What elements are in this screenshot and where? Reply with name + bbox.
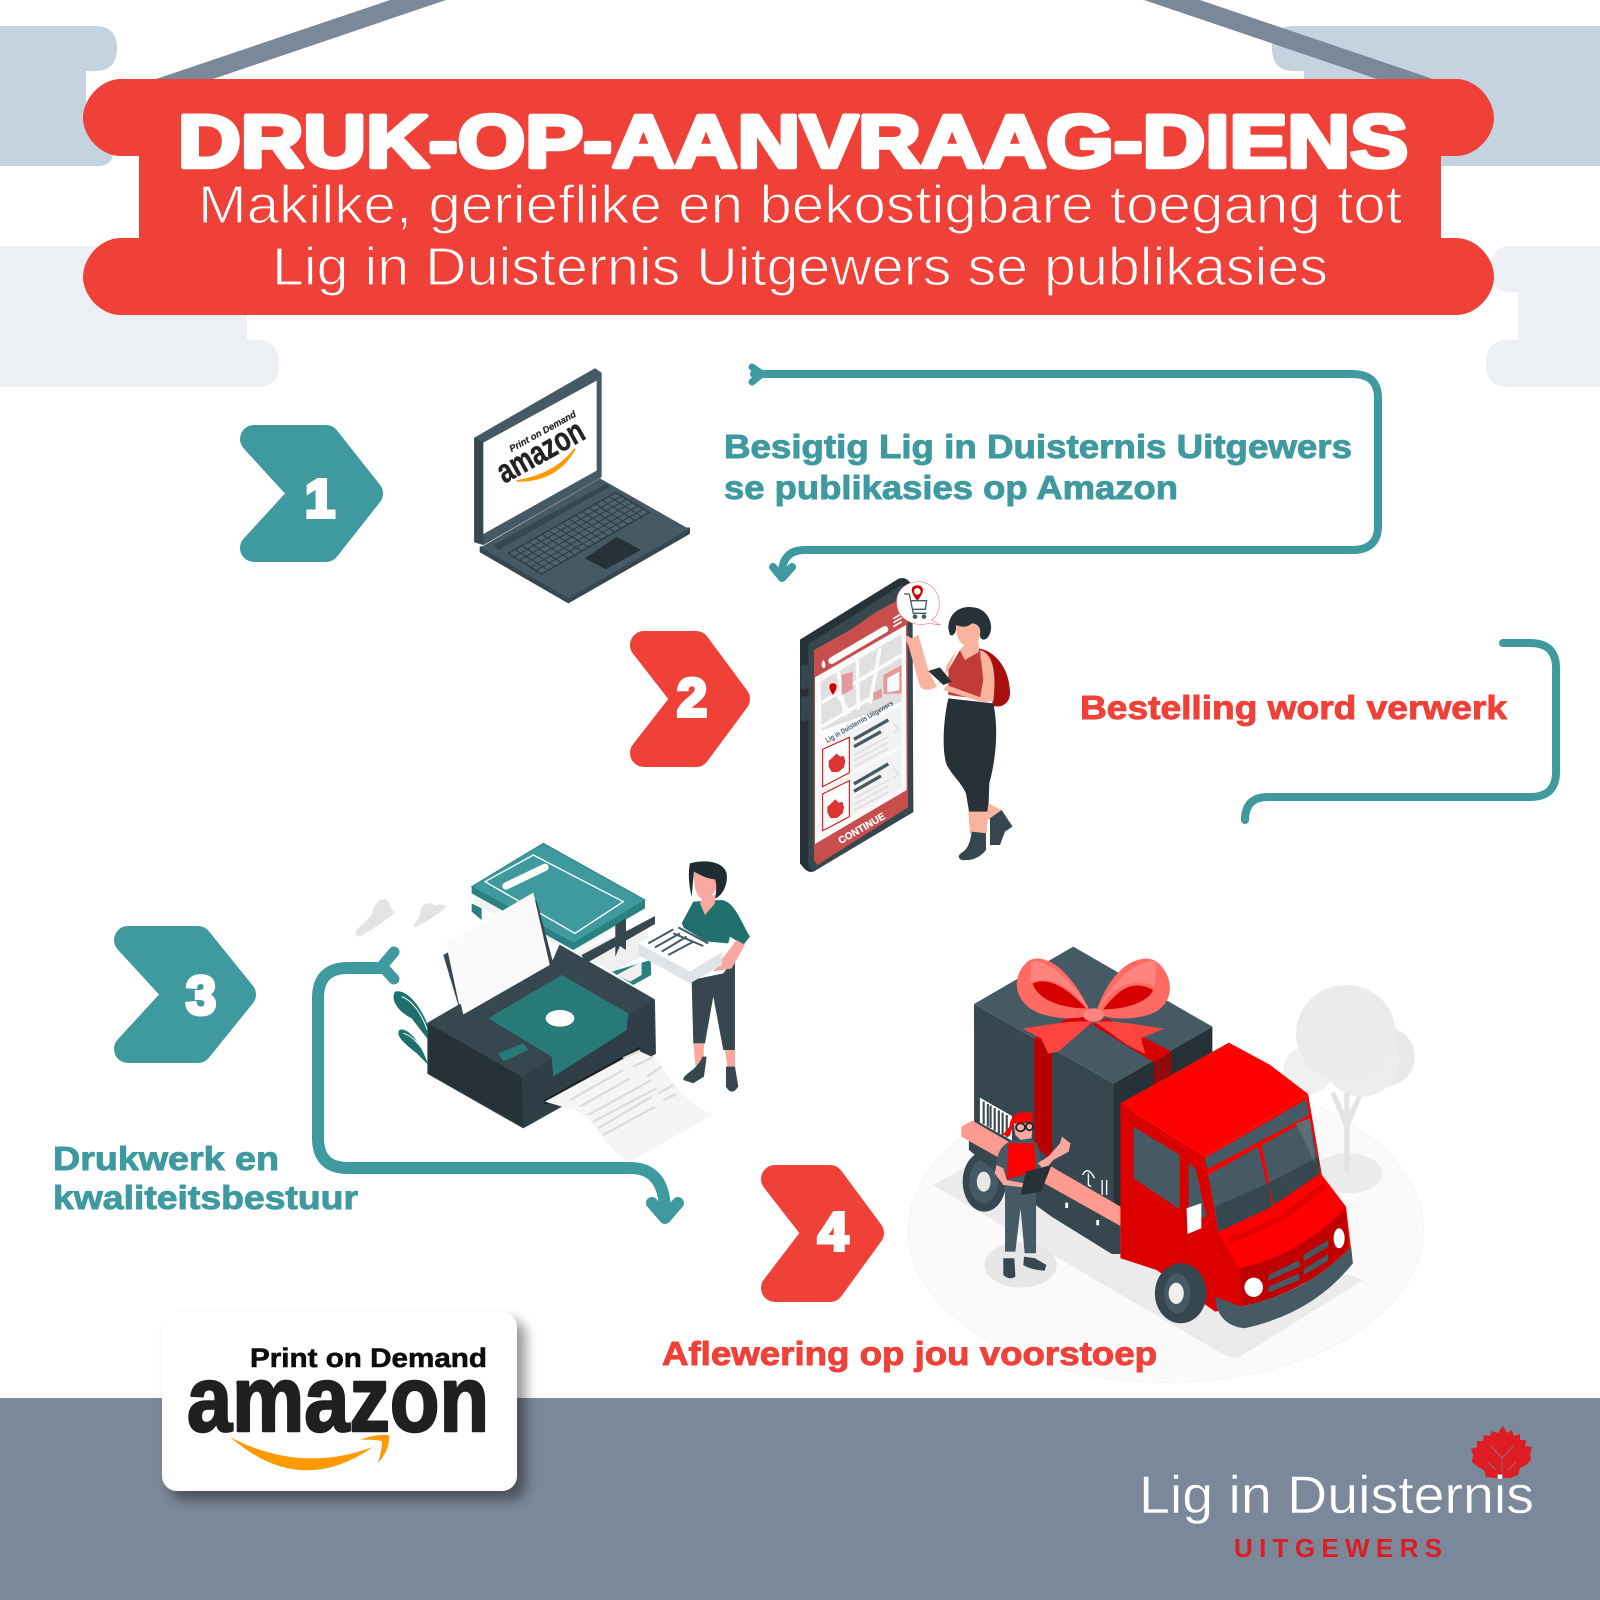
- step 3 label: kwaliteitsbestuur: [53, 1179, 358, 1216]
- print on demand text: Print on Demand: [250, 1343, 487, 1373]
- phone: [801, 579, 913, 872]
- gift box: [974, 947, 1212, 1208]
- list items: [818, 707, 902, 835]
- ground: [908, 1077, 1423, 1383]
- cart speech bubble: [897, 582, 941, 625]
- flame tree mark: [1471, 1426, 1532, 1478]
- bumper: [1215, 1247, 1353, 1328]
- laptop illustration: [475, 369, 689, 602]
- mirror: [1187, 1203, 1201, 1234]
- woman: [905, 607, 1013, 860]
- number 3: 3: [186, 966, 216, 1026]
- trackpad: [585, 537, 641, 569]
- step 2 label: Bestelling word verwerk: [1080, 689, 1508, 726]
- arrow: step 2 to step 3: [1245, 643, 1556, 820]
- headlights: [1244, 1278, 1263, 1297]
- footer band: [0, 1398, 1600, 1600]
- screen logo: amazon: [490, 413, 591, 491]
- smoke clouds: [355, 899, 447, 937]
- truck bed rail: [961, 1121, 1120, 1226]
- laptop screen: [475, 369, 601, 544]
- step 4 chevron: [775, 1179, 870, 1288]
- printer body: [428, 946, 655, 1127]
- front wheel: [1155, 1263, 1207, 1323]
- step 1 chevron: [254, 439, 369, 548]
- truck cab: [1120, 1043, 1353, 1328]
- arrow: step 3 to step 4: [318, 952, 678, 1218]
- title: DRUK-OP-AANVRAAG-DIENS: [178, 100, 1408, 183]
- windshield: [1208, 1147, 1272, 1232]
- subtitle line 2: Lig in Duisternis Uitgewers se publikasies: [272, 237, 1328, 297]
- man with clipboard: [984, 1112, 1070, 1288]
- stack of books: [472, 843, 655, 985]
- logo subtitle: UITGEWERS: [1234, 1533, 1442, 1563]
- grille: [1239, 1208, 1349, 1307]
- subtitle line 1: Makilke, gerieflike en bekostigbare toegang tot: [198, 175, 1402, 235]
- continue button text: CONTINUE: [837, 811, 888, 847]
- store title: Lig in Duisternis Uitgewers: [824, 698, 895, 745]
- title banner: [83, 79, 1494, 315]
- publisher logo: [1139, 1426, 1534, 1563]
- step 3 label: [53, 1140, 358, 1216]
- printer illustration: [355, 843, 750, 1162]
- woman holding paper: [638, 861, 750, 1092]
- tree: [1283, 985, 1415, 1193]
- arrow: step 1 to step 2: [752, 367, 1378, 578]
- barcode: [980, 1098, 1012, 1141]
- step 3 chevron: [128, 940, 242, 1049]
- box symbols: [1083, 1171, 1107, 1195]
- phone and woman illustration: [801, 579, 1013, 872]
- number 4: 4: [818, 1202, 848, 1262]
- amazon print on demand card: [162, 1312, 517, 1491]
- delivery truck illustration: [908, 947, 1423, 1383]
- step 1 label: [724, 428, 1352, 506]
- step 1 label: Besigtig Lig in Duisternis Uitgewers: [724, 428, 1352, 465]
- logo wordmark: Lig in Duisternis: [1139, 1466, 1534, 1525]
- hood creases: [1231, 1187, 1324, 1240]
- bow: [1017, 958, 1170, 1054]
- leaves: [394, 991, 428, 1065]
- background clouds: [0, 26, 1600, 387]
- step 2 chevron: [644, 645, 736, 753]
- side window: [1134, 1127, 1180, 1209]
- printed paper: [545, 1051, 713, 1162]
- rear wheel: [963, 1152, 1006, 1212]
- amazon wordmark: amazon: [187, 1347, 489, 1451]
- map: [821, 634, 902, 731]
- amazon smile: [230, 1435, 389, 1470]
- number 2: 2: [677, 668, 707, 728]
- number 1: 1: [305, 469, 335, 529]
- screen logo: Print on Demand: [508, 409, 578, 454]
- step 3 label: Drukwerk en: [53, 1140, 279, 1177]
- paper in tray: [443, 893, 553, 1017]
- roof lines: [156, 0, 1433, 79]
- step 1 label: se publikasies op Amazon: [724, 469, 1178, 506]
- under body: [969, 1140, 1120, 1254]
- card shadow: [170, 1320, 526, 1500]
- step 4 label: Aflewering op jou voorstoep: [662, 1335, 1157, 1372]
- keyboard: [508, 493, 649, 574]
